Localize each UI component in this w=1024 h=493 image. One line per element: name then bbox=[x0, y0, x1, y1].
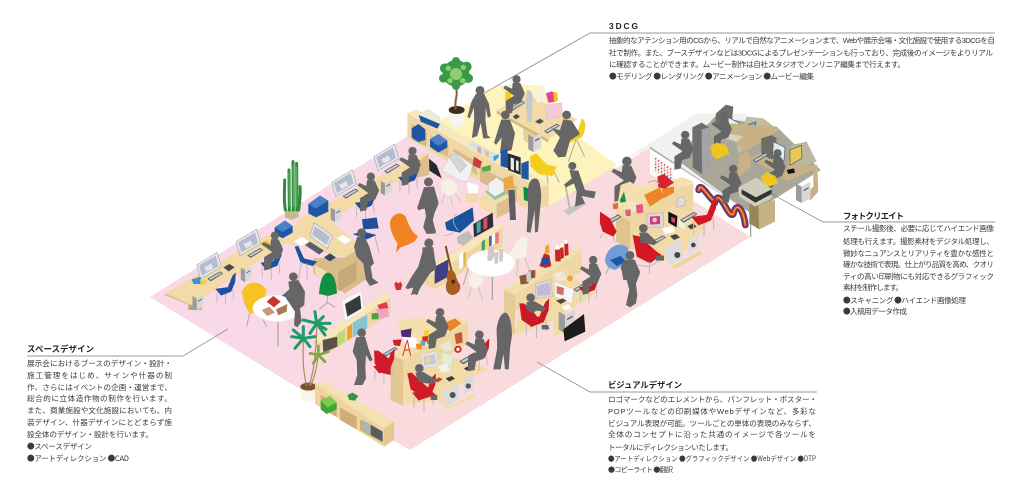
text block: photo create: 確かな技術で表現。仕上がり品質を高め、クオリ bbox=[843, 259, 994, 269]
text block: photo create: ●入稿用データ作成 bbox=[843, 306, 907, 317]
wave graphic bbox=[699, 187, 745, 225]
blue boxes on shelf bbox=[412, 109, 447, 153]
standing woman bbox=[527, 178, 541, 233]
standing man near shelf bbox=[417, 178, 439, 234]
text block: space design: 設全体のデザイン・設計を行います。 bbox=[27, 429, 153, 439]
text block: space design: スペースデザイン bbox=[27, 344, 94, 354]
leader line: photo create bbox=[770, 193, 995, 222]
standing person leaning on desk bbox=[354, 228, 379, 286]
monitors and keyboards bbox=[192, 144, 400, 285]
centre bookshelf and round table bbox=[406, 207, 601, 369]
back wall bbox=[623, 113, 750, 213]
yellow chairs bbox=[505, 92, 585, 162]
red chairs on right desk bbox=[600, 197, 717, 274]
figurines bbox=[539, 240, 569, 268]
person in photo studio bbox=[672, 131, 693, 170]
workstation two bbox=[750, 135, 818, 203]
standing person bbox=[417, 178, 438, 234]
text block: space design: また、商業施設や文化施設においても、内 bbox=[27, 405, 172, 415]
cactus and left work area bbox=[165, 144, 438, 346]
dot poster bbox=[653, 155, 674, 189]
text block: visual design: ビジュアルデザイン bbox=[608, 380, 682, 390]
equipment under desk bbox=[559, 309, 575, 333]
person at meeting table bbox=[282, 272, 305, 327]
yellow executive chair bbox=[530, 153, 559, 183]
text block: space design: 総合的に立体造作物の制作を行います。 bbox=[27, 393, 172, 403]
green chair bbox=[319, 273, 337, 309]
person with scooter bbox=[563, 162, 596, 215]
text block: visual design: POPツールなどの印刷媒体やWebデザインなど、多彩な bbox=[608, 406, 816, 416]
blue chairs and seated designers bbox=[215, 147, 421, 305]
floor: design studio bbox=[150, 136, 750, 450]
red toy bbox=[394, 282, 402, 290]
bookshelf bbox=[424, 213, 503, 289]
partition wall with wave artwork bbox=[650, 147, 751, 237]
text block: visual design: 全体のコンセプトに沿った共通のイメージで各ツールを bbox=[608, 429, 816, 439]
printer and desk equipment bbox=[429, 152, 478, 207]
seated 3DCG designers bbox=[503, 75, 580, 157]
text block: space design: 施工管理をはじめ、サインや什器の制 bbox=[27, 370, 172, 380]
divider shelf bbox=[407, 109, 549, 210]
text block: 3DCG: 抽象的なアテンション用のCGから、リアルで自然なアニメーションまで、Webや展示会場・文化施設で使用する3DCGを自 bbox=[609, 35, 995, 45]
standing person with bag bbox=[353, 328, 373, 385]
text block: visual design: トータルにディレクションいたします。 bbox=[608, 442, 733, 452]
desk block with orange boxes bbox=[612, 157, 711, 269]
text block: visual design: ロゴマークなどのエレメントから、パンフレット・ポスター・ bbox=[608, 394, 817, 404]
text block: photo create bbox=[843, 211, 994, 317]
architectural model on plinth bbox=[479, 175, 516, 220]
low shelf front bbox=[315, 382, 394, 447]
text block: space design: ●スペースデザイン bbox=[27, 441, 92, 452]
right aisle person bbox=[621, 251, 640, 307]
text block: space design: 装デザイン、什器デザインにとどまらず施 bbox=[27, 417, 172, 427]
standing woman in aisle bbox=[493, 313, 512, 369]
boxes on block bbox=[519, 270, 535, 285]
floor: 3DCG yellow zone bbox=[407, 85, 617, 210]
text block: space design: 展示会におけるブースのデザイン・設計・ bbox=[27, 358, 172, 368]
toys on desk bbox=[401, 328, 412, 337]
text block: 3DCG: 社で制作。また、ブースデザインなどは3DCGによるプレゼンテーションも行っており、完成後のイメージをよりリアル bbox=[609, 48, 993, 58]
man with folded leg bbox=[406, 238, 437, 295]
person leaning bbox=[405, 239, 436, 295]
standing person at blue chair bbox=[621, 251, 640, 280]
corner cabinet bbox=[313, 243, 370, 293]
red chairs at double desk bbox=[373, 338, 489, 411]
chairs and designers at photo desk bbox=[519, 256, 601, 338]
photo room floor bbox=[675, 117, 821, 214]
right desks near wall bbox=[600, 157, 717, 280]
text block: photo create: ●スキャニング ●ハイエンド画像処理 bbox=[843, 295, 966, 306]
yellow zone desk bbox=[497, 85, 577, 152]
text block: 3DCG bbox=[609, 21, 995, 82]
3DCG zone objects bbox=[407, 57, 596, 234]
palm plant bbox=[292, 312, 330, 403]
seated designers at double desk bbox=[415, 308, 488, 400]
monitors on right desk bbox=[604, 197, 698, 266]
workstation one bbox=[711, 105, 778, 177]
standing people in 3DCG zone bbox=[467, 86, 515, 153]
text block: 3DCG: ●モデリング ●レンダリング ●アニメーション ●ムービー編集 bbox=[609, 71, 814, 82]
text block: photo create: フォトクリエイト bbox=[843, 211, 904, 221]
photo desk block bbox=[504, 240, 598, 341]
text block: space design: ●アートディレクション ●CAD bbox=[27, 453, 129, 464]
equipment tower bbox=[692, 123, 709, 174]
lower left zone bbox=[292, 291, 512, 447]
text block: space design bbox=[27, 344, 172, 464]
text block: photo create: 素材を制作します。 bbox=[843, 282, 903, 292]
round meeting table bbox=[253, 295, 301, 346]
text block: photo create: ティの高い印刷物にも対応できるグラフィック bbox=[843, 271, 994, 281]
text block: photo create: スチール撮影後、必要に応じてハイエンド画像 bbox=[843, 223, 994, 233]
blue lounge chair bbox=[444, 207, 474, 246]
double desk block bbox=[383, 318, 488, 411]
leader line: visual design bbox=[537, 362, 817, 392]
white side chairs bbox=[468, 237, 530, 300]
computer towers bbox=[192, 180, 392, 310]
blue shell armchair bbox=[605, 245, 628, 276]
person at back of photo studio bbox=[720, 165, 741, 204]
photo studio room bbox=[623, 105, 821, 237]
text block: space design: 作、さらにはイベントの企画・運営まで、 bbox=[27, 382, 172, 392]
standing woman bbox=[493, 313, 512, 369]
scanner on stand bbox=[738, 177, 775, 229]
text block: visual design: ●コピーライト ●翻訳 bbox=[608, 465, 673, 475]
books and posters on shelf bbox=[468, 142, 529, 202]
acoustic guitar bbox=[446, 246, 460, 295]
round table with robot toys bbox=[463, 247, 515, 300]
cactus bbox=[284, 162, 300, 220]
text block: photo create: 微妙なニュアンスとリアリティを豊かな感性と bbox=[843, 248, 994, 258]
potted tree bbox=[439, 57, 473, 127]
yellow chair bbox=[242, 283, 267, 327]
text block: visual design: ●アートディレクション ●グラフィックデザイン ●Webデザイン ●DTP bbox=[608, 454, 817, 464]
left bench desks bbox=[165, 153, 429, 310]
text block: photo create: 処理も行えます。撮影素材をデジタル処理し、 bbox=[843, 236, 994, 246]
wall shelf with chalkboard bbox=[313, 291, 391, 354]
text block: 3DCG: に確認することができます。ムービー制作は自社スタジオでノンリニア編集まで行えます。 bbox=[609, 59, 905, 69]
blue stacking chair bbox=[353, 217, 379, 253]
text block: 3DCG: 3DCG bbox=[609, 21, 638, 31]
blue filing boxes bbox=[275, 196, 328, 238]
text block: visual design bbox=[608, 380, 817, 475]
orange panton chair bbox=[390, 213, 418, 253]
leader line: 3DCG bbox=[472, 33, 995, 100]
text block: visual design: ビジュアル表現が可能。ツールごとの単体の表現のみならず、 bbox=[608, 418, 816, 428]
leader line: space design bbox=[27, 329, 228, 356]
photo desk monitors bbox=[535, 279, 553, 299]
